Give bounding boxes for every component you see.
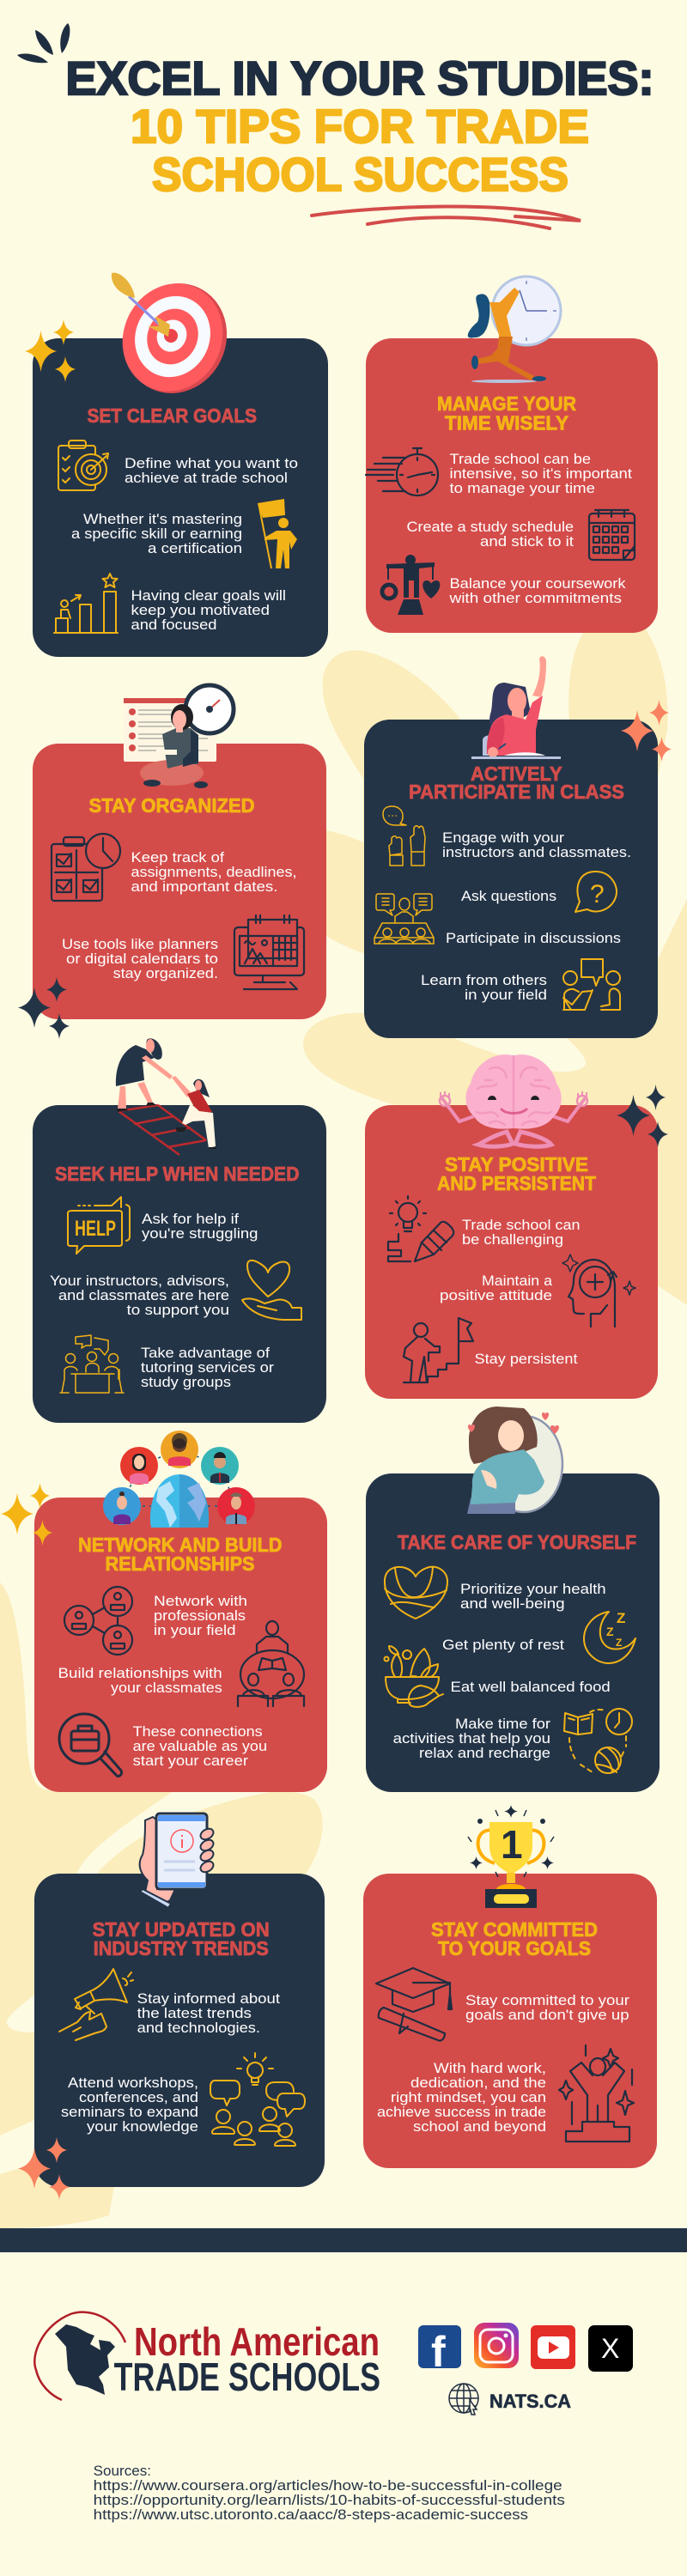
decorative accent marks xyxy=(17,23,70,63)
text: positive attitude: Maintain a xyxy=(482,1273,553,1289)
sources xyxy=(94,2464,565,2523)
panel: manage your time wisely xyxy=(366,276,658,633)
text: stay informed: the latest trends xyxy=(137,2006,252,2021)
text: keep track: assignments, deadlines, xyxy=(131,865,297,880)
icon: globe with cursor xyxy=(449,2384,478,2415)
text: having: keep you motivated xyxy=(131,603,270,618)
icon: moon with zzz: Z xyxy=(616,1637,622,1649)
icon: graduation cap and diploma xyxy=(376,1968,452,2041)
logo: north american trade schools: TRADE SCHOOLS xyxy=(114,2354,380,2399)
icon: question bubble: ? xyxy=(590,880,605,908)
heading: TAKE CARE OF YOURSELF xyxy=(398,1531,636,1553)
icon: facebook xyxy=(418,2325,461,2376)
text: rest: Get plenty of rest xyxy=(442,1637,564,1653)
panel: network and build relationships xyxy=(1,1431,327,1792)
text: tutoring: Take advantage of xyxy=(141,1346,270,1361)
text: whether xyxy=(71,512,242,556)
icon: hands and speech bubble xyxy=(383,806,425,866)
text: with hard work: school and beyond xyxy=(413,2119,546,2135)
icon: megaphone xyxy=(59,1969,133,2040)
heading: STAY COMMITTED xyxy=(431,1918,598,1941)
panel: stay updated xyxy=(18,1814,325,2200)
text: trade school intensive: intensive, so it's important xyxy=(450,466,632,482)
text: make time: relax and recharge xyxy=(419,1746,550,1761)
text: build relationships: Build relationships with xyxy=(58,1666,222,1681)
text: with hard work: achieve success in trade xyxy=(377,2105,546,2120)
text: tutoring xyxy=(141,1346,275,1390)
heading: PARTICIPATE IN CLASS xyxy=(409,781,624,803)
icon: orange sparkles xyxy=(18,2137,70,2200)
icon: winner on podium xyxy=(559,2045,634,2142)
heading xyxy=(78,1534,282,1575)
text: network: professionals xyxy=(154,1608,246,1624)
icon: yellow sparkles xyxy=(25,319,76,382)
text: keep track xyxy=(131,850,297,895)
icon: navy sparkles xyxy=(617,1084,668,1147)
text: use tools: or digital calendars to xyxy=(66,951,218,967)
icon: stopwatch xyxy=(366,448,438,495)
icon: person with flag xyxy=(258,499,297,568)
sources: Sources: xyxy=(94,2464,151,2479)
icon: people network xyxy=(64,1587,132,1655)
text: connections xyxy=(133,1724,267,1769)
icon: clipboard and target xyxy=(58,440,108,490)
heading: TIME WISELY xyxy=(445,412,568,434)
text: ask for help xyxy=(142,1212,258,1242)
text: stay committed: Stay committed to your xyxy=(465,1993,630,2008)
icon: calendar xyxy=(589,510,635,560)
text: website: NATS.CA xyxy=(489,2391,571,2412)
illustration: person with checklist and clock xyxy=(124,685,234,788)
text: participate: Participate in discussions xyxy=(446,931,621,946)
icon: navy sparkles xyxy=(18,977,70,1039)
icon: growth bars xyxy=(54,574,118,633)
text: with hard work: right mindset, you can xyxy=(391,2090,546,2105)
text: food: Eat well balanced food xyxy=(450,1680,611,1695)
icon: moon with zzz: Z xyxy=(617,1610,625,1626)
heading xyxy=(437,1153,596,1194)
text: engage: Engage with your xyxy=(442,830,565,846)
text: use tools xyxy=(62,937,218,981)
text: engage: instructors and classmates. xyxy=(442,845,631,860)
text: network: in your field xyxy=(154,1623,235,1638)
text: instructors xyxy=(50,1273,229,1318)
icon: help bubble xyxy=(68,1197,130,1254)
text: trade school challenging: be challenging xyxy=(462,1232,563,1248)
text: stay informed: and technologies. xyxy=(137,2020,260,2036)
icon: study group at table xyxy=(60,1335,124,1393)
text: build relationships: your classmates xyxy=(111,1680,222,1696)
panel: take care of yourself xyxy=(366,1406,660,1792)
heading xyxy=(93,1918,270,1959)
icon: magnifier with briefcase xyxy=(59,1714,122,1777)
text: prioritize xyxy=(460,1582,606,1612)
text: define xyxy=(125,456,298,486)
icon: salad bowl xyxy=(385,1646,443,1707)
icon: hearts xyxy=(468,1413,559,1434)
text: use tools: Use tools like planners xyxy=(62,937,218,952)
illustration: woman helping climber on ladder xyxy=(116,1038,216,1155)
text: trade school intensive: Trade school can be xyxy=(450,452,591,467)
text: having: Having clear goals will xyxy=(131,588,286,604)
sources: https://www.utsc.utoronto.ca/aacc/8-steps-academic-success xyxy=(94,2507,528,2523)
icon: moon with zzz: Z xyxy=(606,1625,614,1638)
text: whether: Whether it's mastering xyxy=(83,512,242,527)
icon: target with arrow xyxy=(105,266,245,410)
heading: STAY ORGANIZED xyxy=(89,794,254,817)
heading: SEEK HELP WHEN NEEDED xyxy=(55,1163,299,1185)
text: network xyxy=(154,1594,247,1638)
icon: x xyxy=(588,2325,633,2372)
heading: NETWORK AND BUILD xyxy=(78,1534,282,1556)
text: trade school intensive xyxy=(450,452,632,496)
icon: question bubble xyxy=(575,872,617,912)
panel: seek help xyxy=(33,1038,326,1423)
panel: stay positive xyxy=(365,1054,668,1399)
text: use tools: stay organized. xyxy=(113,966,218,981)
icon: book clock basketball xyxy=(564,1709,632,1773)
panel: stay committed xyxy=(363,1805,657,2168)
panel: set clear goals xyxy=(25,266,328,657)
icon: help bubble: HELP xyxy=(75,1217,116,1241)
icon: people learning xyxy=(563,959,620,1010)
icon: heart in hand xyxy=(242,1261,301,1320)
title underline xyxy=(312,206,581,228)
illustration: smiling brain xyxy=(440,1054,587,1146)
text: connections: are valuable as you xyxy=(133,1739,267,1754)
text: balance: with other commitments xyxy=(448,591,622,606)
text: instructors: to support you xyxy=(127,1303,229,1318)
illustration: global network of people xyxy=(103,1431,255,1528)
heading: RELATIONSHIPS xyxy=(105,1552,254,1575)
text: instructors: Your instructors, advisors, xyxy=(50,1273,229,1289)
text: learn xyxy=(421,973,547,1003)
icon: class discussion xyxy=(374,894,434,944)
text: stay informed: Stay informed about xyxy=(137,1991,280,2007)
text: whether: a specific skill or earning xyxy=(71,526,242,542)
text: make time xyxy=(393,1716,551,1761)
text: having xyxy=(131,588,286,633)
icon: youtube xyxy=(531,2325,575,2369)
heading: TO YOUR GOALS xyxy=(438,1937,591,1959)
heading: STAY POSITIVE xyxy=(445,1153,588,1176)
text: ask for help: Ask for help if xyxy=(142,1212,239,1227)
panel: actively participate xyxy=(364,656,672,1038)
text: build relationships xyxy=(58,1666,222,1696)
heading xyxy=(431,1918,598,1959)
text: attend: conferences, and xyxy=(79,2090,198,2105)
title: EXCEL IN YOUR STUDIES: xyxy=(65,52,654,105)
text: having: and focused xyxy=(131,617,216,633)
icon: balance person xyxy=(382,555,440,615)
icon: instagram xyxy=(474,2323,519,2368)
text: engage xyxy=(442,830,631,860)
text: tutoring: tutoring services or xyxy=(141,1360,275,1376)
text: study schedule: Create a study schedule xyxy=(407,519,574,535)
heading: ACTIVELY xyxy=(471,762,562,785)
text: with hard work xyxy=(377,2061,546,2135)
sources: https://opportunity.org/learn/lists/10-habits-of-successful-students xyxy=(94,2493,565,2508)
icon: moon with zzz xyxy=(584,1610,635,1663)
text: make time: activities that help you xyxy=(393,1731,550,1747)
text: learn: Learn from others xyxy=(421,973,547,988)
illustration: trophy xyxy=(468,1805,554,1908)
illustration: hand holding phone xyxy=(140,1814,216,1908)
icon: checklist clock xyxy=(52,834,120,901)
text: positive attitude xyxy=(440,1273,553,1303)
text: attend: your knowledge xyxy=(87,2119,198,2135)
text: stay committed: goals and don't give up xyxy=(465,2008,629,2023)
panel: stay organized xyxy=(18,685,326,1039)
text: study schedule xyxy=(407,519,574,550)
text: persistent: Stay persistent xyxy=(474,1352,578,1367)
text: positive attitude: positive attitude xyxy=(440,1288,552,1303)
text: connections: start your career xyxy=(133,1753,249,1769)
text: trade school challenging xyxy=(462,1218,581,1248)
icon: head with plus xyxy=(562,1255,635,1327)
text: attend: Attend workshops, xyxy=(68,2075,198,2091)
text: ask for help: you're struggling xyxy=(142,1226,258,1242)
illustration: student raising hand xyxy=(471,656,561,759)
text: keep track: and important dates. xyxy=(131,879,278,895)
icon: wrapped heart xyxy=(385,1567,447,1619)
text: prioritize: and well-being xyxy=(460,1596,565,1612)
text: keep track: Keep track of xyxy=(131,850,224,866)
text: trade school intensive: to manage your time xyxy=(450,481,595,496)
icon: facebook: f xyxy=(431,2328,446,2376)
text: learn: in your field xyxy=(465,987,547,1003)
text: define: Define what you want to xyxy=(125,456,298,471)
text: attend xyxy=(61,2075,198,2135)
text: balance xyxy=(448,576,626,606)
icon: digital calendar monitor xyxy=(234,915,304,989)
heading: INDUSTRY TRENDS xyxy=(94,1937,269,1959)
text: define: achieve at trade school xyxy=(125,471,288,486)
heading: AND PERSISTENT xyxy=(437,1172,596,1194)
text: balance: Balance your coursework xyxy=(450,576,626,592)
heading: SET CLEAR GOALS xyxy=(88,404,257,427)
icon: climber with flag xyxy=(404,1318,473,1382)
title: SCHOOL SUCCESS xyxy=(152,148,568,201)
text: instructors: and classmates are here xyxy=(58,1288,229,1303)
text: whether: a certification xyxy=(148,541,242,556)
footer band xyxy=(0,2228,687,2252)
text: study schedule: and stick to it xyxy=(480,534,574,550)
icon: x: X xyxy=(601,2333,619,2364)
text: make time: Make time for xyxy=(455,1716,551,1732)
illustration: woman hugging herself in mirror xyxy=(467,1406,562,1514)
icon: yellow sparkles xyxy=(1,1483,52,1546)
text: attend: seminars to expand xyxy=(61,2105,198,2120)
heading xyxy=(409,762,624,803)
sources: https://www.coursera.org/articles/how-to-be-successful-in-college xyxy=(94,2478,562,2494)
illustration: trophy: 1 xyxy=(501,1822,523,1867)
icon: bulb and pencil xyxy=(388,1196,453,1261)
text: with hard work: With hard work, xyxy=(434,2061,546,2076)
logo: north american trade schools: North American xyxy=(134,2319,380,2364)
text: stay committed xyxy=(465,1993,630,2023)
title xyxy=(65,52,654,201)
title: 10 TIPS FOR TRADE xyxy=(131,100,589,153)
text: with hard work: dedication, and the xyxy=(410,2075,546,2091)
heading: STAY UPDATED ON xyxy=(93,1918,270,1941)
text: stay informed xyxy=(137,1991,280,2036)
text: prioritize: Prioritize your health xyxy=(460,1582,606,1597)
icon: study table xyxy=(238,1621,304,1706)
heading: MANAGE YOUR xyxy=(437,392,576,415)
illustration: woman pushing clock xyxy=(468,276,561,383)
text: trade school challenging: Trade school can xyxy=(462,1218,581,1233)
text: ask questions: Ask questions xyxy=(461,889,556,904)
text: tutoring: study groups xyxy=(141,1375,231,1390)
logo: north american trade schools xyxy=(34,2312,380,2400)
icon: people with ideas xyxy=(210,2053,305,2146)
text: connections: These connections xyxy=(133,1724,263,1740)
icon: orange sparkles xyxy=(621,700,672,762)
heading xyxy=(437,392,576,434)
text: network: Network with xyxy=(154,1594,247,1609)
